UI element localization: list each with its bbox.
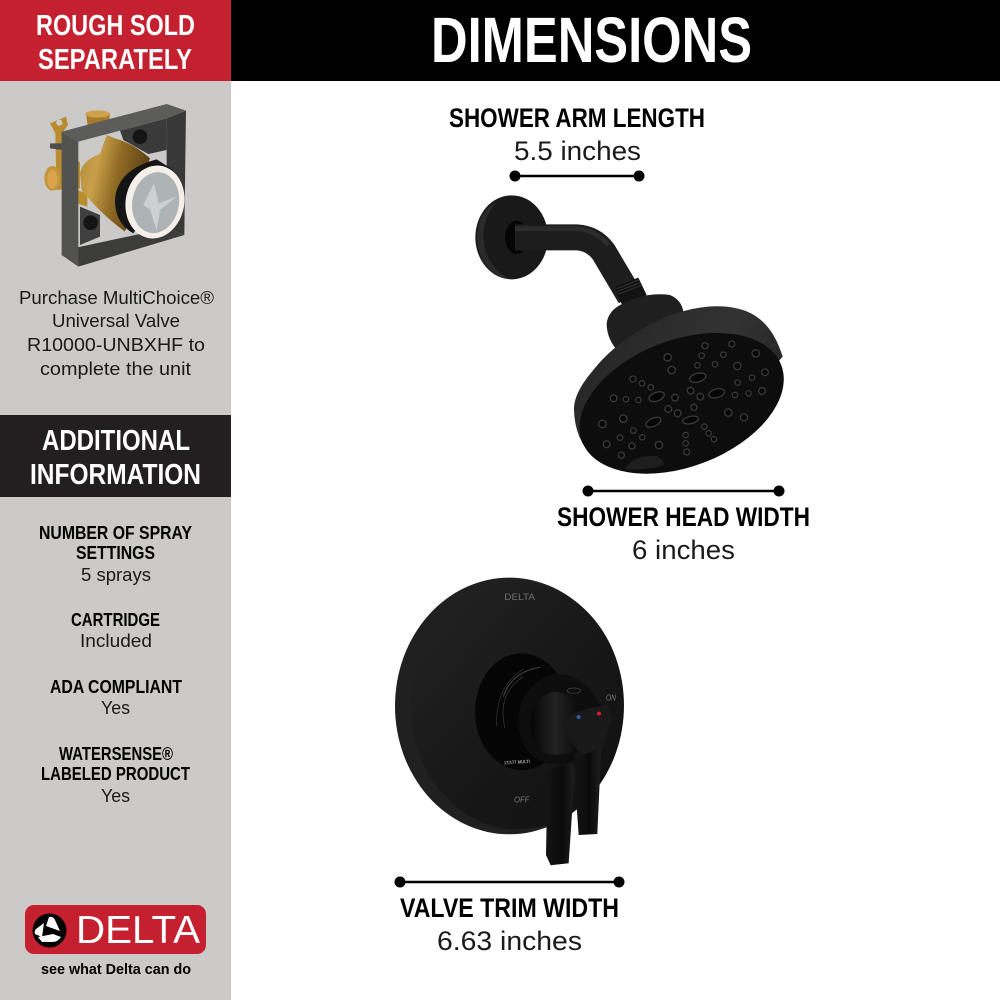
dimension: valve trim width: 6.63 inches xyxy=(437,926,582,956)
title: dimensions: DIMENSIONS xyxy=(431,4,752,76)
spec: number of spray settings: SETTINGS xyxy=(76,542,155,563)
spec: cartridge: CARTRIDGE xyxy=(71,609,160,630)
brass body xyxy=(80,135,150,232)
dimension: shower head width: SHOWER HEAD WIDTH xyxy=(557,502,810,532)
header: rough sold separately: SEPARATELY xyxy=(38,44,192,76)
spec: cartridge xyxy=(71,609,160,651)
cartridge xyxy=(115,159,173,233)
spec: number of spray settings xyxy=(39,522,193,585)
spec: watersense labeled product: WATERSENSE® xyxy=(59,743,173,764)
box frame xyxy=(62,104,186,267)
shower head illustration xyxy=(475,195,804,501)
icon: universal valve xyxy=(44,104,190,267)
spec: ada compliant: ADA COMPLIANT xyxy=(50,676,183,697)
header: rough sold separately: ROUGH SOLD xyxy=(36,10,195,42)
title: dimensions xyxy=(231,0,1000,81)
neck xyxy=(607,294,683,353)
heading: additional information xyxy=(0,415,231,497)
spec: watersense labeled product: Yes xyxy=(101,786,130,806)
dimension: valve trim width xyxy=(394,876,624,956)
lever head with indicators xyxy=(566,705,612,755)
logo: delta: DELTA xyxy=(76,909,200,952)
face tab xyxy=(626,456,664,470)
frame rails and screws xyxy=(80,118,167,245)
handle body xyxy=(518,674,602,764)
text block: purchase note: Universal Valve xyxy=(52,311,180,331)
text block: purchase note xyxy=(19,288,214,379)
dimension: shower head width: 6 inches xyxy=(632,535,735,565)
rear lever xyxy=(575,740,601,835)
spec: watersense labeled product xyxy=(41,743,191,806)
logo: delta xyxy=(25,905,206,978)
plate markings: DELTA xyxy=(504,592,535,602)
valve trim illustration xyxy=(395,578,624,865)
spray nozzles xyxy=(599,341,768,458)
spec: cartridge: Included xyxy=(80,631,152,651)
heading: additional information: INFORMATION xyxy=(30,459,201,491)
spec: number of spray settings: 5 sprays xyxy=(81,565,151,585)
wall flange xyxy=(475,195,548,279)
spec: ada compliant: Yes xyxy=(101,698,130,718)
trim plate xyxy=(395,578,624,834)
text block: purchase note: R10000-UNBXHF to xyxy=(27,335,205,355)
text block: purchase note: Purchase MultiChoice® xyxy=(19,288,214,308)
heading: additional information: ADDITIONAL xyxy=(42,425,190,457)
dimension: shower arm length xyxy=(449,103,705,182)
dimension: valve trim width: VALVE TRIM WIDTH xyxy=(400,893,619,923)
dimension: shower arm length: SHOWER ARM LENGTH xyxy=(449,103,705,133)
head body xyxy=(559,306,804,501)
spec: ada compliant xyxy=(50,676,183,718)
plate markings xyxy=(504,592,616,805)
plate markings: OFF xyxy=(514,796,530,805)
arm xyxy=(515,237,630,297)
dimension: shower arm length: 5.5 inches xyxy=(514,136,641,166)
threads xyxy=(615,278,647,308)
valve collar xyxy=(475,653,568,770)
header: rough sold separately xyxy=(0,0,231,81)
panel: sidebar xyxy=(0,81,231,1000)
valve collar: 17/177 MULTI xyxy=(504,759,530,765)
text block: purchase note: complete the unit xyxy=(40,359,191,379)
spec: watersense labeled product: LABELED PRODUCT xyxy=(41,763,191,784)
head face xyxy=(559,306,804,501)
spec: number of spray settings: NUMBER OF SPRAY xyxy=(39,522,193,543)
dimension: shower head width xyxy=(557,486,810,565)
logo: delta: see what Delta can do xyxy=(41,962,191,978)
plate markings: ON xyxy=(606,694,616,703)
front lever xyxy=(546,762,575,865)
